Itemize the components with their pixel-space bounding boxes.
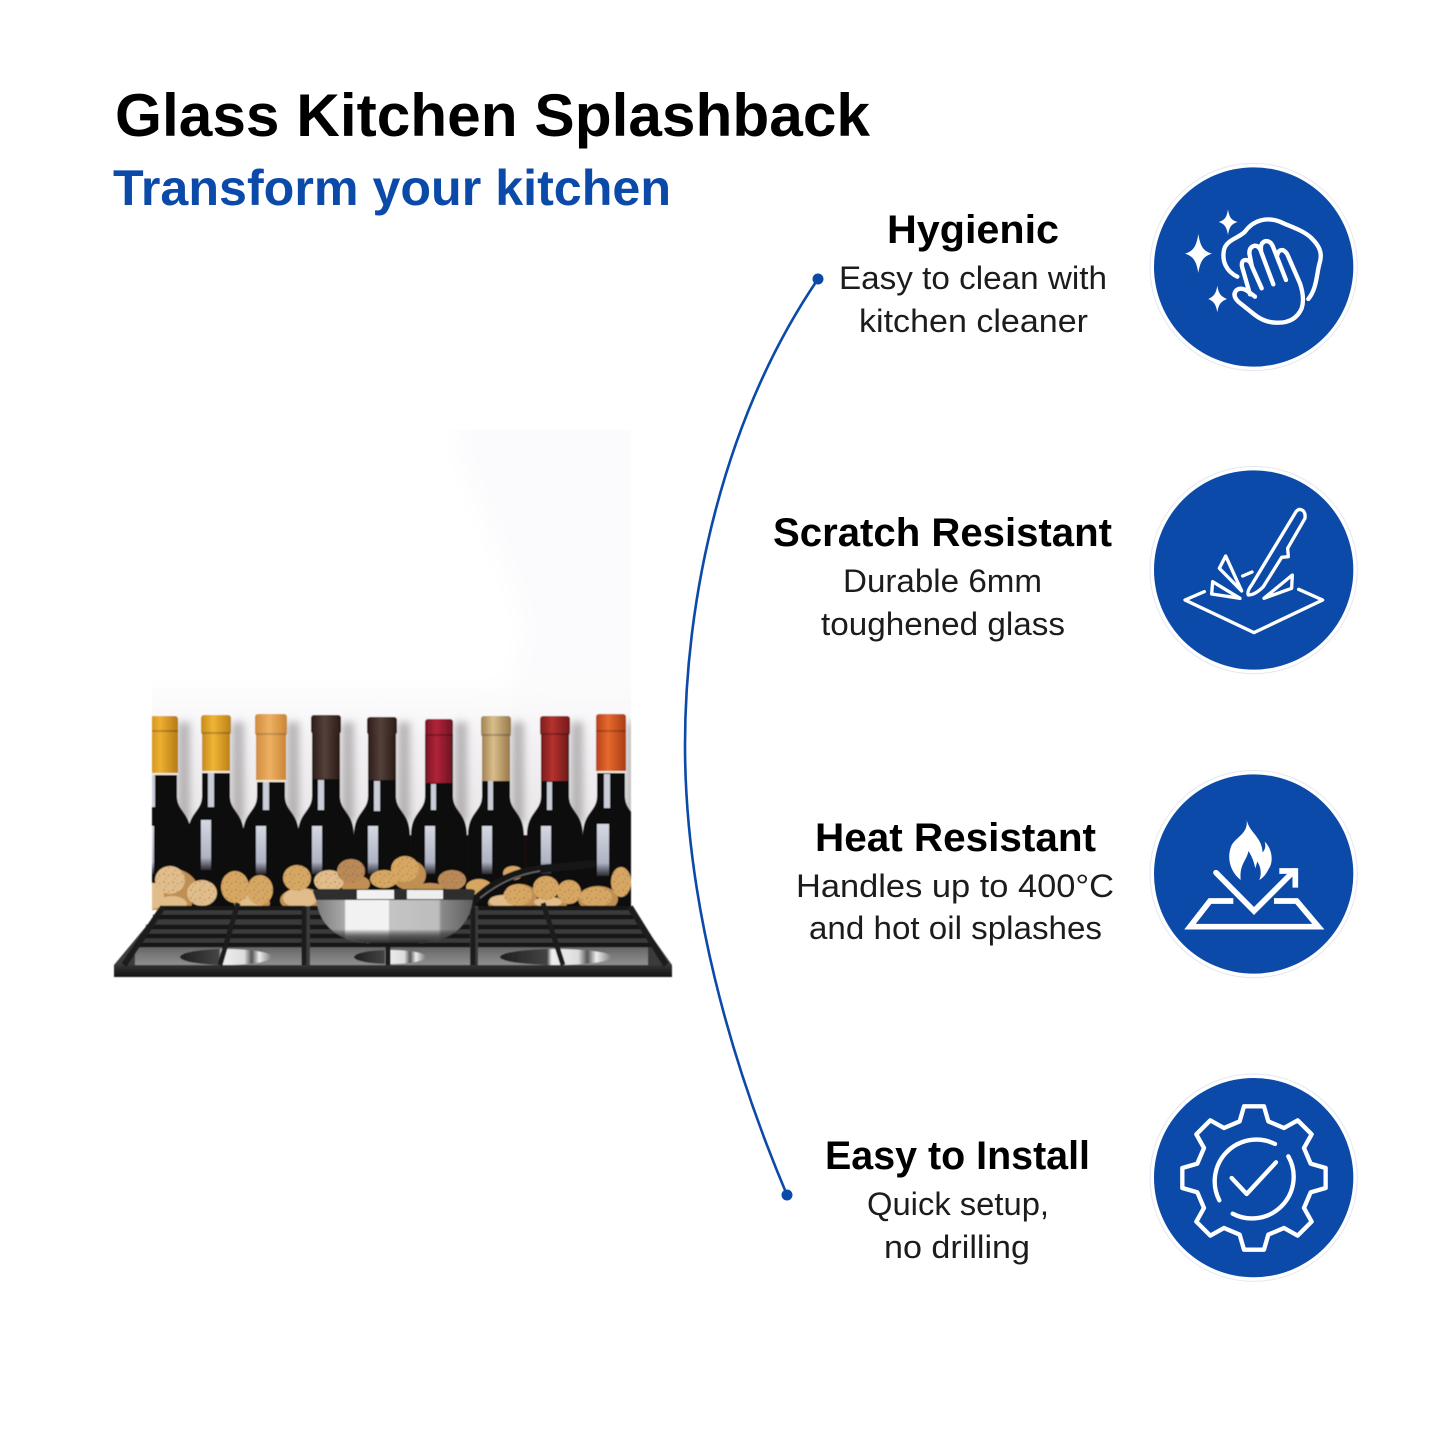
description: Heat Resistant <box>796 868 1114 946</box>
heading: Easy to Install: Easy to Install <box>825 1134 1090 1178</box>
description: Heat Resistant: and hot oil splashes <box>809 910 1102 946</box>
description: Scratch Resistant: Durable 6mm <box>843 563 1042 599</box>
frying pan <box>313 864 592 943</box>
description: Scratch Resistant <box>821 563 1065 642</box>
description: Hygienic: kitchen cleaner <box>859 303 1088 339</box>
bottle 3 <box>243 714 299 910</box>
bottle 1 <box>151 715 190 882</box>
description: Hygienic: Easy to clean with <box>839 260 1107 296</box>
feature: Scratch Resistant <box>773 466 1357 674</box>
splashback panel with bottles and corks <box>151 713 632 911</box>
bottle 9 <box>582 713 632 906</box>
icon: flame over surface with arrow <box>1150 770 1357 978</box>
subtitle: Transform your kitchen <box>113 160 671 216</box>
bottle 6 <box>411 719 467 910</box>
icon: knife scratching surface <box>1150 466 1357 674</box>
title: Glass Kitchen Splashback <box>115 82 871 149</box>
bottle 2 <box>188 715 244 910</box>
bottle 4 <box>298 715 354 910</box>
icon: gear with check mark <box>1150 1074 1357 1281</box>
icon: hand wiping with sparkles <box>1150 163 1357 371</box>
feature: Heat Resistant <box>796 770 1357 978</box>
description: Hygienic <box>839 260 1107 339</box>
heading: Heat Resistant: Heat Resistant <box>815 816 1096 860</box>
feature: Easy to Install <box>825 1074 1357 1281</box>
description: Easy to Install <box>867 1186 1049 1265</box>
gas hob <box>114 903 672 977</box>
infographic canvas <box>113 92 1358 1282</box>
description: Easy to Install: no drilling <box>884 1229 1030 1265</box>
connector curve with end dots <box>685 274 824 1200</box>
description: Heat Resistant: Handles up to 400°C <box>796 868 1114 904</box>
bottle 7 <box>468 716 524 910</box>
bottle 8 <box>527 716 583 910</box>
description: Easy to Install: Quick setup, <box>867 1186 1049 1222</box>
corks <box>141 856 631 913</box>
heading: Hygienic: Hygienic <box>887 208 1059 252</box>
description: Scratch Resistant: toughened glass <box>821 606 1065 642</box>
product image: wine bottle splashback above hob <box>113 713 673 978</box>
bottle 5 <box>354 717 410 910</box>
heading: Scratch Resistant: Scratch Resistant <box>773 511 1112 555</box>
burners <box>180 949 612 965</box>
feature: Hygienic <box>839 163 1357 371</box>
